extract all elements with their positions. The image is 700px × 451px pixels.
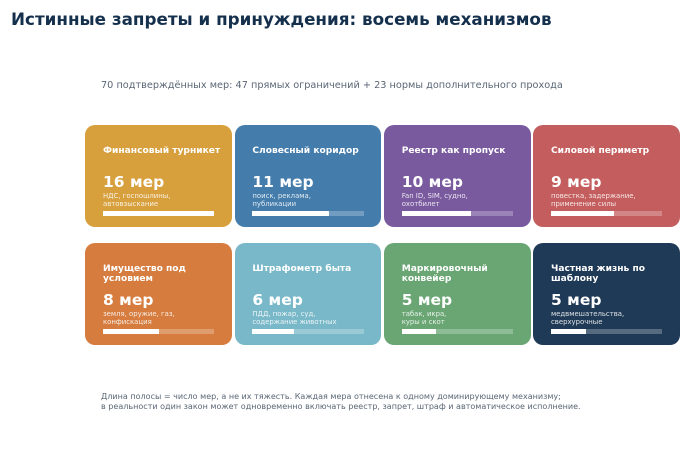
panel: Штрафометр быта: 6 мер (252, 291, 303, 309)
panel: Штрафометр быта: ПДД, пожар, суд, (252, 310, 315, 318)
panel: Словесный коридор: поиск, реклама, (252, 192, 311, 200)
panel: Имущество под условием: Имущество под (103, 264, 186, 274)
panel: Силовой периметр (533, 125, 680, 227)
panel: Реестр как пропуск: охотбилет (402, 200, 440, 208)
footnote: в реальности один закон может одновременно включать реестр, запрет, штраф и автоматическое исполнение. (101, 402, 581, 411)
panel: Словесный коридор: Словесный коридор (252, 146, 359, 156)
panel: Маркировочный конвейер (384, 243, 531, 345)
panel: Реестр как пропуск: 10 мер (402, 173, 463, 191)
panel: Силовой периметр: Силовой периметр (551, 146, 649, 156)
panel: Имущество под условием: условием (103, 274, 153, 284)
panel: Реестр как пропуск: Fan ID, SIM, судно, (402, 192, 468, 200)
panel: Маркировочный конвейер: Маркировочный (402, 264, 488, 274)
panel: Финансовый турникет: автовзыскание (103, 200, 158, 208)
footnote (101, 392, 581, 411)
panel: Имущество под условием: конфискация (103, 318, 152, 326)
panel: Частная жизнь по шаблону: Частная жизнь по (551, 264, 645, 274)
panel: Финансовый турникет: 16 мер (103, 173, 164, 191)
panel: Финансовый турникет: НДС, госпошлины, (103, 192, 170, 200)
panel: Маркировочный конвейер: куры и скот (402, 318, 445, 326)
panel: Силовой периметр: повестка, задержание, (551, 192, 636, 200)
subtitle: 70 подтверждённых мер: 47 прямых ограничений + 23 нормы дополнительного прохода (101, 80, 563, 91)
panel: Имущество под условием: земля, оружие, газ, (103, 310, 175, 318)
panel: Частная жизнь по шаблону: шаблону (551, 274, 598, 284)
panel: Силовой периметр: 9 мер (551, 173, 601, 191)
panel: Финансовый турникет (85, 125, 232, 227)
panel: Словесный коридор: 11 мер (252, 173, 314, 191)
panel: Имущество под условием: 8 мер (103, 291, 153, 309)
panel: Частная жизнь по шаблону (533, 243, 680, 345)
panel: Штрафометр быта: содержание животных (252, 318, 337, 326)
panel: Маркировочный конвейер: табак, икра, (402, 310, 446, 318)
footnote: Длина полосы = число мер, а не их тяжесть. Каждая мера отнесена к одному доминирующему механизму; (101, 392, 561, 401)
panel: Частная жизнь по шаблону: 5 мер (551, 291, 601, 309)
title: Истинные запреты и принуждения: восемь механизмов (11, 8, 552, 28)
panel: Маркировочный конвейер: конвейер (402, 274, 451, 284)
panel: Штрафометр быта (235, 243, 381, 345)
panel: Реестр как пропуск (384, 125, 531, 227)
panel: Штрафометр быта: Штрафометр быта (252, 264, 351, 274)
panel: Силовой периметр: применение силы (551, 200, 616, 208)
panel: Реестр как пропуск: Реестр как пропуск (402, 146, 505, 156)
panel: Словесный коридор: публикации (252, 200, 296, 208)
panel: Маркировочный конвейер: 5 мер (402, 291, 452, 309)
panel: Частная жизнь по шаблону: медвмешательства, (551, 310, 624, 318)
panel: Финансовый турникет: Финансовый турникет (103, 146, 220, 156)
panel: Частная жизнь по шаблону: сверхурочные (551, 318, 602, 326)
panel: Имущество под условием (85, 243, 232, 345)
panel: Словесный коридор (235, 125, 381, 227)
